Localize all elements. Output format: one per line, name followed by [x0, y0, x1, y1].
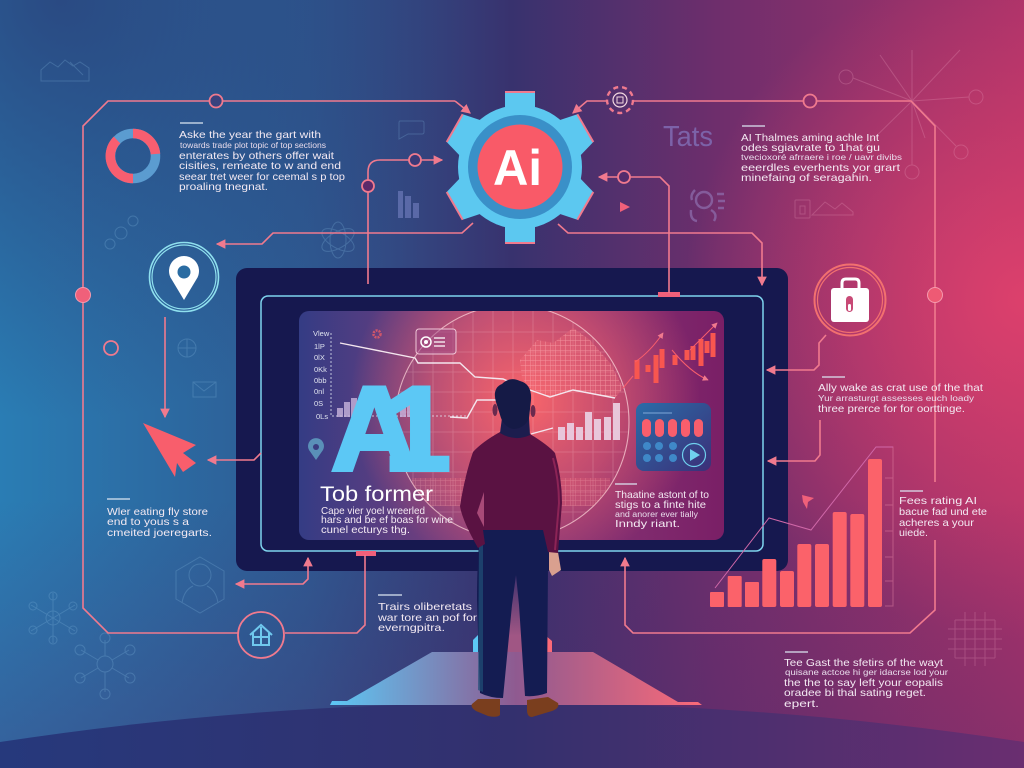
text block: top right: odes sgiavrate to 1hat gu	[741, 142, 880, 154]
shirt	[460, 432, 562, 553]
text block: top right: minefaing of seragahin.	[741, 172, 872, 184]
text block: top right: AI Thalmes aming achle Int	[741, 132, 879, 144]
connector: to location	[217, 223, 473, 244]
bar chart: growth	[710, 447, 893, 607]
text: screen right: Thaatine astont of to	[615, 489, 709, 501]
text block: top left	[179, 123, 345, 193]
text block: chart caption: uiede.	[899, 527, 928, 539]
text: screen left: hars and be ef boas for wine	[321, 514, 453, 526]
axis labels: 0bb	[314, 376, 327, 385]
hand	[549, 552, 561, 576]
text block: top left: cisities, remeate to w and end	[179, 160, 341, 172]
axis labels	[313, 329, 330, 421]
legs	[477, 526, 548, 698]
text block: bottom right: epert.	[784, 698, 819, 710]
candlestick chart	[634, 333, 716, 383]
icon: house	[238, 612, 284, 658]
text: screen left	[321, 505, 453, 536]
text block: top left: enterates by others offer wait	[179, 150, 334, 162]
text block: top left: Aske the year the gart with	[179, 129, 321, 141]
text: screen left: Cape vier yoel wreerled	[321, 505, 425, 517]
big A1: A	[331, 362, 418, 496]
arrow: right text to monitor	[768, 420, 820, 461]
axis labels: 0Ls	[316, 412, 328, 421]
heading: Tob former: Tob former	[320, 483, 433, 506]
icon: grid cross	[948, 612, 1002, 666]
axis labels: 0nl	[314, 387, 324, 396]
head	[495, 379, 531, 429]
icon: mountain	[41, 60, 89, 81]
icon: user hexagon	[176, 557, 224, 613]
text block: bottom right: the the to say left your eopalis	[784, 677, 943, 689]
arrow: pin to cursor	[164, 317, 166, 417]
text block: bottom centre	[377, 595, 478, 634]
text block: left middle	[107, 499, 212, 539]
text block: left middle: Wler eating fly store	[107, 506, 208, 518]
arrow: monitor to cursor	[208, 453, 261, 460]
text block: bottom right	[784, 652, 948, 710]
icon: snowflake	[29, 592, 77, 644]
chart: donut	[110, 133, 156, 179]
text: screen right: Inndy riant.	[615, 518, 680, 530]
axis labels: 0S	[314, 399, 323, 408]
text block: bottom centre: everngpitra.	[378, 622, 445, 634]
control panel	[636, 403, 711, 471]
icon: link	[105, 216, 138, 249]
text block: top left: seear tret weer for ceemal s p top	[179, 171, 345, 183]
connector: outer frame left	[83, 101, 470, 633]
text block: bottom right: quisane actcoe hi ger idacrse lod your	[785, 668, 948, 677]
text block: chart caption: acheres a your	[899, 517, 975, 529]
map mesh	[412, 328, 623, 506]
small bars	[337, 398, 410, 417]
icon: network	[75, 633, 135, 699]
text block: chart caption	[899, 491, 987, 539]
text block: bottom centre: Trairs oliberetats	[378, 601, 472, 613]
globe grid	[395, 305, 630, 539]
text block: top right	[741, 126, 902, 184]
icon: star network	[839, 50, 983, 179]
icon: globe	[178, 339, 196, 357]
gear icon: AI: Ai	[493, 140, 542, 196]
connector: outer frame right	[573, 101, 935, 633]
text block: top left: towards trade plot topic of top sections	[180, 141, 326, 150]
text block: chart caption: Fees rating AI	[899, 495, 977, 507]
icon: cursor	[143, 423, 196, 477]
icon: small gear dial	[607, 87, 633, 113]
text block: right middle: three prerce for for oorttinge.	[818, 403, 965, 415]
monitor stand	[330, 571, 702, 705]
axis labels: Vlew	[313, 329, 330, 338]
text block: bottom right: Tee Gast the sfetirs of the wayt	[784, 657, 943, 669]
heading: Tats: Tats	[663, 121, 713, 153]
floor	[0, 703, 1024, 768]
frame nodes	[76, 94, 942, 355]
text block: left middle: end to yous s a	[107, 516, 189, 528]
text block: right middle: Yur arrasturgt assesses euch loady	[818, 394, 974, 403]
axis labels: 1lP	[314, 342, 325, 351]
arrow: hexagon connector	[236, 558, 308, 584]
screen	[299, 305, 724, 540]
connector: inner left	[362, 154, 442, 284]
arrow: briefcase to monitor	[767, 335, 826, 370]
axis labels: 0Kk	[314, 365, 327, 374]
text: screen right: stigs to a finte hite	[615, 499, 706, 511]
text block: bottom centre: war tore an pof for	[377, 612, 478, 624]
connector: to gear right	[599, 171, 669, 293]
icon: play triangle	[620, 202, 630, 212]
arm gap	[477, 492, 484, 527]
icon: location pin	[150, 242, 218, 312]
icon: small bars	[398, 191, 419, 218]
monitor	[236, 268, 788, 705]
big A1: 1	[384, 362, 451, 496]
gear and pin icons	[374, 330, 380, 338]
line chart	[340, 343, 615, 434]
connector: to briefcase side	[558, 224, 762, 285]
axis labels: 0lX	[314, 353, 325, 362]
text block: top right: eeerdles everhents yor grart	[741, 162, 900, 174]
text block: right middle	[818, 377, 983, 415]
white bars	[558, 403, 620, 440]
text block: right middle: Ally wake as crat use of the that	[818, 382, 983, 394]
icon: chat bubble	[399, 121, 424, 139]
card icon	[416, 329, 456, 354]
text block: top right: tvecioxoré afrraere i roe / uavr divibs	[741, 153, 902, 162]
icon: photo and mountain	[795, 200, 853, 218]
icon: envelope	[193, 382, 216, 397]
text block: bottom right: oradee bi thal sating reget.	[784, 687, 926, 699]
text block: top left: proaling tnegnat.	[179, 181, 268, 193]
monitor base tab bottom	[356, 551, 376, 556]
text: screen right: and anorer ever tially	[615, 510, 698, 519]
icon: atom	[318, 222, 358, 258]
text: screen right	[615, 484, 709, 530]
person	[460, 379, 562, 717]
icon: briefcase	[814, 264, 886, 336]
neck and ears	[500, 418, 530, 438]
text block: left middle: cmeited joeregarts.	[107, 527, 212, 539]
text: screen left: cunel ecturys thg.	[321, 524, 410, 536]
icon: face	[691, 190, 725, 221]
monitor base tab	[658, 292, 680, 297]
shoes	[472, 697, 558, 717]
text block: chart caption: bacue fad und ete	[899, 506, 987, 518]
gear icon: AI	[443, 92, 597, 243]
